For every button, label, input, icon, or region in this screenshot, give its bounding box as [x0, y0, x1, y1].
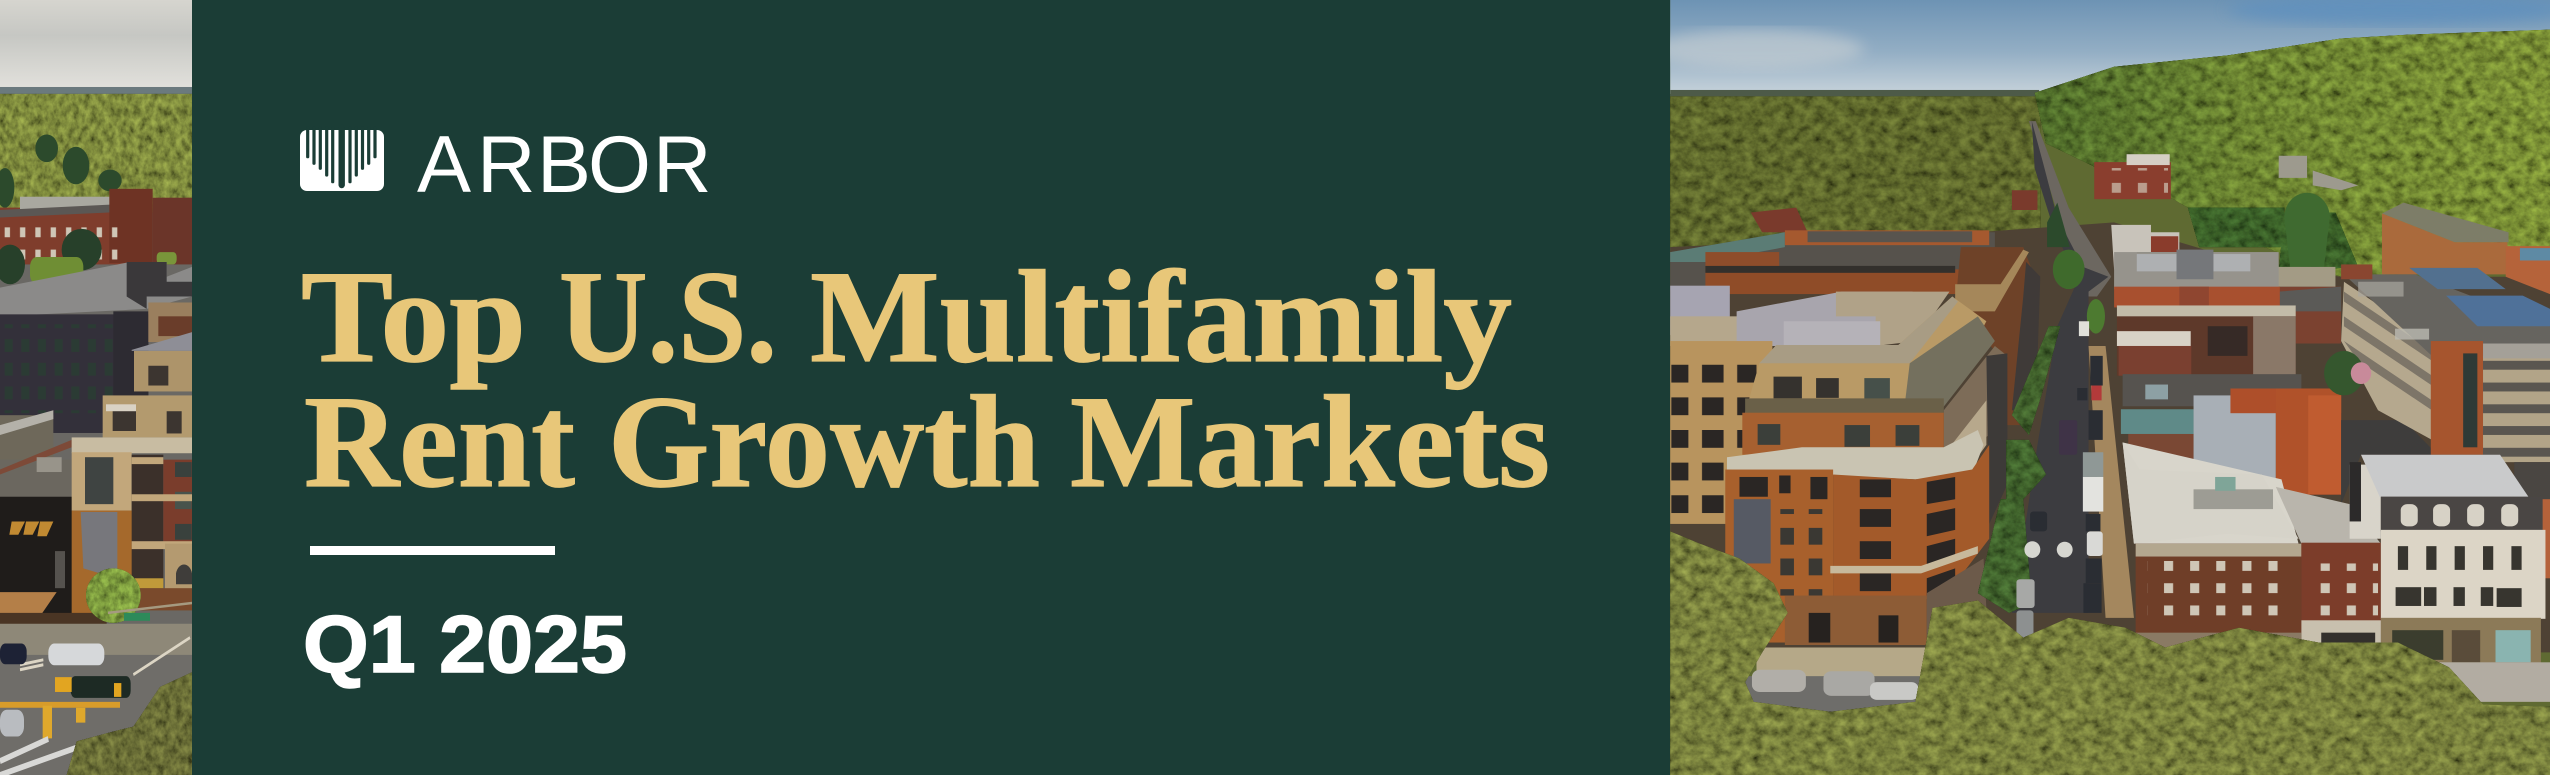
- title: Multifamily: [810, 243, 1512, 390]
- panel: title block: [192, 0, 1670, 775]
- left photo: street scene: [0, 0, 192, 775]
- icon: Arbor logo mark: [300, 128, 384, 191]
- title: Growth: [608, 368, 1040, 515]
- divider line: [310, 546, 555, 555]
- title: Markets: [1070, 368, 1550, 515]
- title: [301, 243, 1550, 515]
- title: Rent: [304, 368, 575, 515]
- date label: Q1 2025: [303, 600, 627, 690]
- title: U.S.: [559, 243, 777, 390]
- right photo: aerial street view: [1670, 0, 2550, 775]
- title: Top: [301, 243, 526, 390]
- logo wordmark: ARBOR: [417, 120, 712, 210]
